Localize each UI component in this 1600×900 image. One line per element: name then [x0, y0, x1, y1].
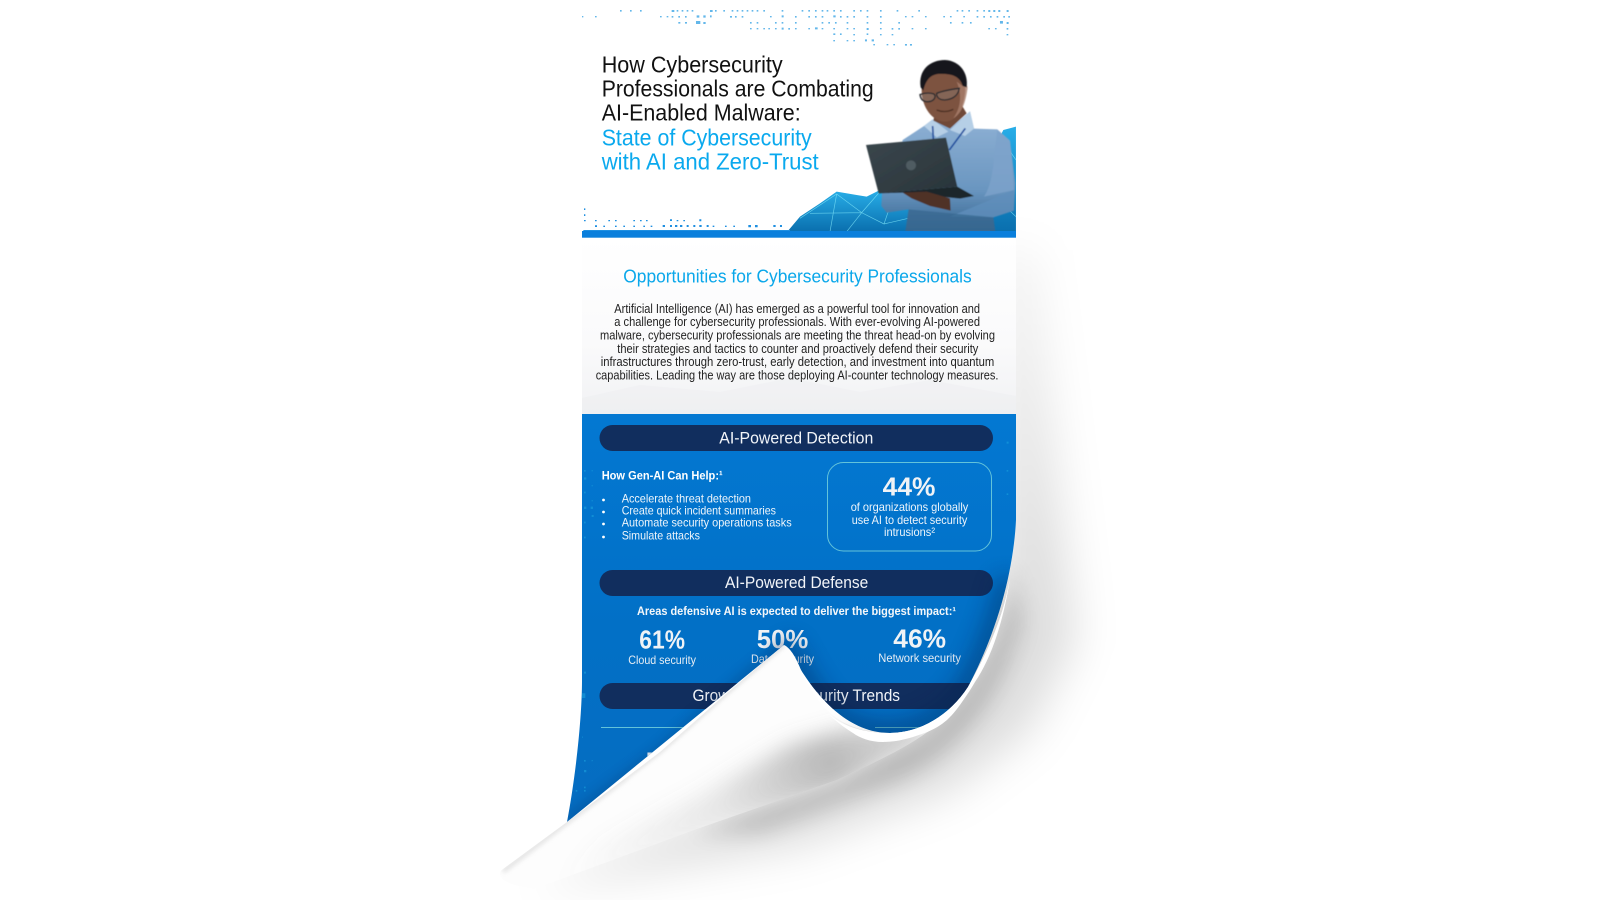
list: how Gen-AI can help: Automate security operations tasks	[622, 516, 792, 530]
panel: blue content	[560, 414, 1016, 844]
dotted pattern: top	[582, 10, 1010, 46]
stat: 61% cloud security: Cloud security	[628, 653, 696, 667]
glasses	[920, 88, 959, 102]
intro paragraph: Artificial Intelligence (AI) has emerged as a powerful tool for innovation and	[614, 302, 980, 316]
section pill: Growing Cybersecurity Trends	[600, 683, 993, 709]
title: AI-Enabled Malware:	[602, 100, 801, 126]
intro paragraph: their strategies and tactics to counter and proactively defend their security	[617, 342, 979, 356]
intro paragraph: capabilities. Leading the way are those deploying AI-counter technology measures.	[596, 368, 998, 382]
subheading: defensive AI: Areas defensive AI is expected to deliver the biggest impact:¹	[637, 606, 956, 618]
person	[866, 60, 1015, 232]
laptop	[866, 138, 957, 193]
stat: 61% cloud security	[628, 630, 696, 666]
list: how Gen-AI can help: Simulate attacks	[622, 528, 700, 542]
callout: 44%: 44%	[883, 472, 935, 502]
shirt	[881, 111, 1015, 232]
list: how Gen-AI can help: Create quick incident summaries	[622, 504, 776, 518]
title: State of Cybersecurity	[602, 124, 812, 150]
callout: 44%: intrusions²	[884, 525, 935, 539]
intro paragraph: a challenge for cybersecurity professionals. With ever-evolving AI-powered	[614, 315, 980, 329]
partially hidden trend figure: 7	[646, 746, 665, 784]
lanyard	[933, 126, 965, 150]
infographic sheet	[560, 0, 1016, 844]
hair	[920, 60, 967, 91]
dotted pattern: blue panel edges	[576, 442, 1009, 792]
heading: Opportunities for Cybersecurity Professionals	[623, 266, 972, 286]
callout: 44%: use AI to detect security	[852, 513, 967, 527]
section pill: AI-Powered Detection	[600, 425, 993, 451]
page curl	[500, 578, 1010, 900]
stat: 46% network security: 46%	[893, 624, 946, 654]
stat: 50% data security	[752, 630, 814, 666]
curl shading	[502, 646, 927, 872]
callout: 44%: of organizations globally	[851, 500, 968, 514]
hero illustration: professional with laptop over network terrain	[787, 60, 1016, 232]
stat: 50% data security: 50%	[757, 624, 808, 654]
white lip of the curl	[819, 578, 1010, 742]
title: How Cybersecurity	[602, 52, 783, 78]
shadow cast by curl on page	[567, 578, 1010, 822]
list: how Gen-AI can help	[602, 468, 792, 542]
section pill: AI-Powered Defense: AI-Powered Defense	[725, 573, 868, 592]
hand	[903, 192, 951, 211]
title: Professionals are Combating	[602, 76, 874, 102]
callout: 44%	[828, 462, 992, 551]
stat: 46% network security: Network security	[878, 651, 961, 665]
title: with AI and Zero-Trust	[601, 148, 819, 174]
intro paragraph: infrastructures through zero-trust, early detection, and investment into quantum	[601, 355, 994, 369]
header rule	[582, 231, 1016, 238]
section pill: Growing Cybersecurity Trends: Growing Cybersecurity Trends	[692, 686, 900, 705]
list: how Gen-AI can help: Accelerate threat detection	[622, 492, 751, 506]
intro paragraph: malware, cybersecurity professionals are meeting the threat head-on by evolving	[600, 328, 995, 342]
section pill: AI-Powered Defense	[600, 570, 993, 596]
dotted pattern: lower left of header	[583, 208, 790, 231]
stat: 46% network security	[879, 629, 961, 664]
title	[601, 52, 874, 174]
network terrain	[787, 127, 1016, 232]
stat: 61% cloud security: 61%	[639, 624, 685, 654]
neck	[933, 105, 967, 129]
section pill: AI-Powered Detection: AI-Powered Detection	[719, 428, 873, 447]
head	[922, 71, 965, 122]
panel: opportunities	[582, 269, 1016, 414]
list: how Gen-AI can help: How Gen-AI Can Help:¹	[602, 468, 723, 482]
intro paragraph	[596, 302, 998, 382]
drop shadow behind curled sheet	[534, 250, 1075, 889]
stat: 50% data security: Data security	[751, 652, 814, 666]
